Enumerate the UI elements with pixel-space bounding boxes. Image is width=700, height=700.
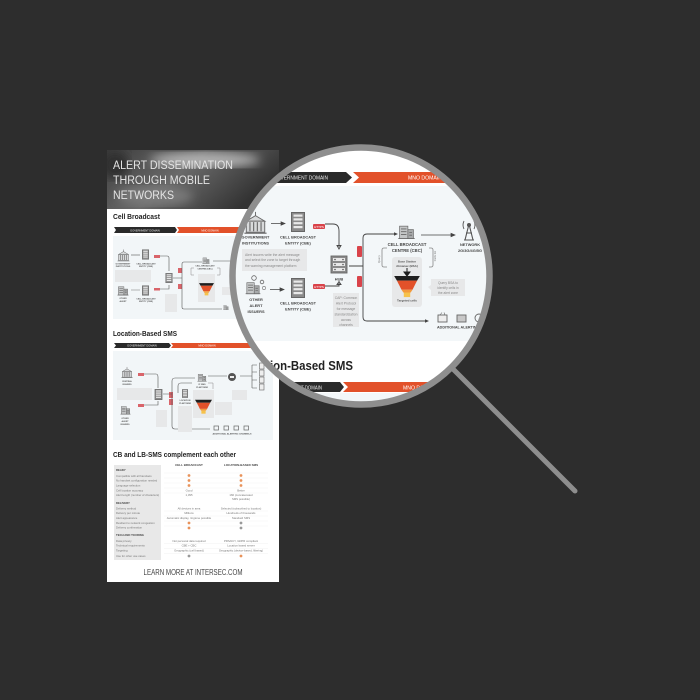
comparison table: Automatic display, ringtone possible [167,516,212,520]
panel: cell broadcast diagram: CELL BROADCAST [136,262,156,266]
zoomed domain banner: location-based sms: MNO DOMAIN [403,386,437,392]
heading: cell broadcast: Cell Broadcast [113,214,161,221]
panel: cell broadcast diagram: ENTITY (CBE) [139,301,153,303]
funnel [394,276,420,297]
tag: https bottom [313,284,325,289]
arrow: top CBE to hub [325,224,341,249]
note: CAP: CAP: Common [335,296,357,300]
icon: hub [331,256,347,282]
comparison table: READY [116,468,126,472]
comparison table: Resilient to network congestion [116,521,155,525]
domain banner: cell broadcast: MNO DOMAIN [201,228,219,232]
panel: location-based sms diagram: LOCATION [180,399,191,402]
comparison table: Language selection [116,484,141,488]
note: CAP: Alert Protocol [336,302,356,306]
panel: location-based sms diagram: OTHER [121,418,129,420]
domain banner: cell broadcast [114,227,272,233]
callout: query BSA: Query BSA to [438,281,458,285]
arrow: CBC to network [421,233,455,237]
panel: base station almanac: Targeted cells [397,298,417,302]
icon: government institutions [242,212,270,246]
comparison table: Better [237,488,245,492]
icon: network tower [458,221,482,253]
comparison table: TECH AND TOURING [116,533,144,537]
panel: cell broadcast diagram: CELL BROADCAST [195,264,215,268]
additional alerting channels [437,312,480,328]
callout: query BSA: the alert zone [438,291,458,295]
icon: other alert issuers: ISSUERS [247,309,265,314]
panel: location-based sms diagram: PLATFORM [179,402,191,405]
icon: other alert issuers: OTHER [249,297,263,302]
zoomed domain banner: MNO DOMAIN [408,176,442,182]
panel: location-based sms diagram: ISSUERS [120,424,130,426]
icon: cell broadcast centre: CENTRE (CBC) [392,248,423,253]
icon: cell broadcast entity, bottom [280,278,317,312]
note: CAP: for message [337,307,355,311]
panel: location-based sms diagram: ADDITIONAL ALERTING CHANNELS [212,432,252,436]
comparison table: 1,395 [186,493,193,497]
note: alert issuers [242,249,307,271]
tags: vertical protocols [357,246,362,287]
note: alert issuers: the warning management platform [245,264,297,268]
icon: network tower: 2G/3G/4G/5G [458,248,482,253]
header banner [101,150,279,209]
title [113,160,233,202]
comparison table: Use for other use cases [116,554,146,558]
icon: cell broadcast entity, top [280,212,317,246]
comparison table: Geographic (cell based) [174,548,204,552]
panel: location-based sms diagram: PLATFORM [196,386,208,389]
domain banner: cell broadcast: GOVERNMENT DOMAIN [130,228,160,232]
comparison table: CELL BROADCAST [175,463,203,467]
tag: https bottom: HTTPS [314,285,324,289]
comparison table: Cell location accuracy [116,488,144,492]
panel: location-based sms diagram: ALERT [122,420,129,423]
icon: cell broadcast entity, top: CELL BROADCAST [280,234,317,240]
note: CAP [333,293,359,327]
panel: location-based sms diagram [113,351,273,440]
domain banner: location-based sms: MNO DOMAIN [198,344,216,348]
icon: other alert issuers: ALERT [250,303,263,308]
arrow: bottom CBE to hub [325,282,341,286]
panel: cell broadcast diagram [113,236,273,319]
zoomed panel background [225,186,500,341]
comparison table [114,463,268,560]
row label panel [114,465,161,560]
note: CAP: standardization [334,312,358,316]
icon: cell broadcast entity, bottom: CELL BROADCAST [280,300,317,306]
arrow: government to CBE [271,222,285,225]
domain banner: location-based sms [114,343,273,348]
poster page [101,150,279,582]
comparison table: Delivery per minute [116,511,141,515]
icon: cell broadcast centre [388,226,427,253]
zoomed domain banner [277,172,445,183]
magnifier handle [453,369,575,491]
comparison table: Alert appearance [116,516,138,520]
comparison table: SMS possible) [232,497,250,501]
icon: hub: HUB [335,276,343,282]
icon: cell broadcast entity, top: ENTITY (CBE) [285,240,312,246]
comparison table: LOCATION-BASED SMS [224,463,258,467]
connectors from hub [349,234,425,321]
comparison table: 160 (concatenated [229,493,253,497]
panel: location-based sms diagram: ISSUERS [122,384,132,386]
heading: zoomed location-based sms: ion-Based SMS [270,358,353,373]
panel: cell broadcast diagram: OTHER [119,298,127,300]
panel: base station almanac: Almanac (BSA) [396,264,418,268]
footer call to action: LEARN MORE AT INTERSEC.COM [144,568,243,577]
comparison table: Alert length (number of characters) [116,493,159,497]
icon: network tower: NETWORK [460,242,480,247]
comparison table: Targeting [116,548,128,552]
additional alerting channels: ADDITIONAL ALERTING CHANNELS [437,326,501,330]
comparison table: Delivery method [116,506,137,510]
comparison table: Hundreds of thousands [227,511,256,515]
callout: query BSA [428,279,465,296]
comparison table: CBE + CBC [182,544,196,548]
comparison table: PRIVACY, GDPR compliant [224,539,258,543]
comparison table: Geographic (device-based, filtering) [219,548,263,552]
note: alert issuers: Alert issuers write the alert message [245,253,300,257]
tag: https top: HTTPS [314,225,324,229]
brackets: query and cell list [377,248,437,267]
callout: query BSA: identify cells in [437,286,459,290]
title: THROUGH MOBILE [113,175,210,187]
note: alert issuers: and select the zone to target through [245,258,300,262]
panel: location-based sms diagram: IF SMS [199,384,206,386]
icon: cell broadcast entity, bottom: ENTITY (CBE) [285,306,312,312]
comparison table: Selected (subscribed to location) [221,506,261,510]
comparison table: Delivery confirmation [116,526,143,530]
panel: cell broadcast diagram: INSTITUTIONS [116,266,131,268]
zoomed domain banner: location-based sms: NT DOMAIN [298,386,322,392]
magnifier lens [225,148,501,413]
title: ALERT DISSEMINATION [113,160,233,172]
arrow: other issuers to CBE [270,288,284,291]
panel: cell broadcast diagram: CELL BROADCAST [136,298,156,300]
domain banner: location-based sms: GOVERNMENT DOMAIN [127,344,157,348]
panel: location-based sms diagram: CENTRAL [122,380,133,383]
comparison table: Compatible with all handsets [116,474,152,478]
heading: location-based sms: Location-Based SMS [113,331,177,338]
panel: base station almanac [392,257,422,307]
panel: cell broadcast diagram: GOVERNMENT [116,264,131,266]
comparison table: Millions [184,511,194,515]
comparison table: Not personal data required [172,539,206,543]
comparison table: Technical requirements [116,544,145,548]
zoomed domain banner: location-based sms [294,382,428,392]
comparison table: Data privacy [116,539,132,543]
icon: government institutions: INSTITUTIONS [242,240,269,246]
panel: cell broadcast diagram: ENTITY (CBE) [139,266,153,268]
comparison table: Location based server [227,544,255,548]
comparison table: No handset configuration needed [116,478,158,482]
brackets: query and cell list: Query [377,255,381,263]
panel: cell broadcast diagram: CENTRE (CBC) [197,268,213,270]
panel: cell broadcast diagram: ALERT [120,300,127,303]
comparison table: DELIVERY [116,501,130,505]
icon: cell broadcast centre: CELL BROADCAST [388,242,427,247]
panel: base station almanac: Base Station [398,260,416,264]
lens ring [232,148,490,404]
tag: https top [313,224,325,229]
icon: other alert issuers [246,276,266,314]
comparison table: Good [186,488,193,492]
comparison table: All devices in area [178,506,201,510]
zoomed domain banner: GOVERNMENT DOMAIN [273,176,328,182]
note: CAP: across [341,318,351,322]
brackets: query and cell list: Cells list [433,251,437,261]
comparison table: Standard SMS [232,516,250,520]
heading: comparison: CB and LB-SMS complement each other [113,450,236,459]
note: CAP: channels [339,323,353,327]
title: NETWORKS [113,190,174,202]
icon: government institutions: GOVERNMENT [242,234,270,240]
